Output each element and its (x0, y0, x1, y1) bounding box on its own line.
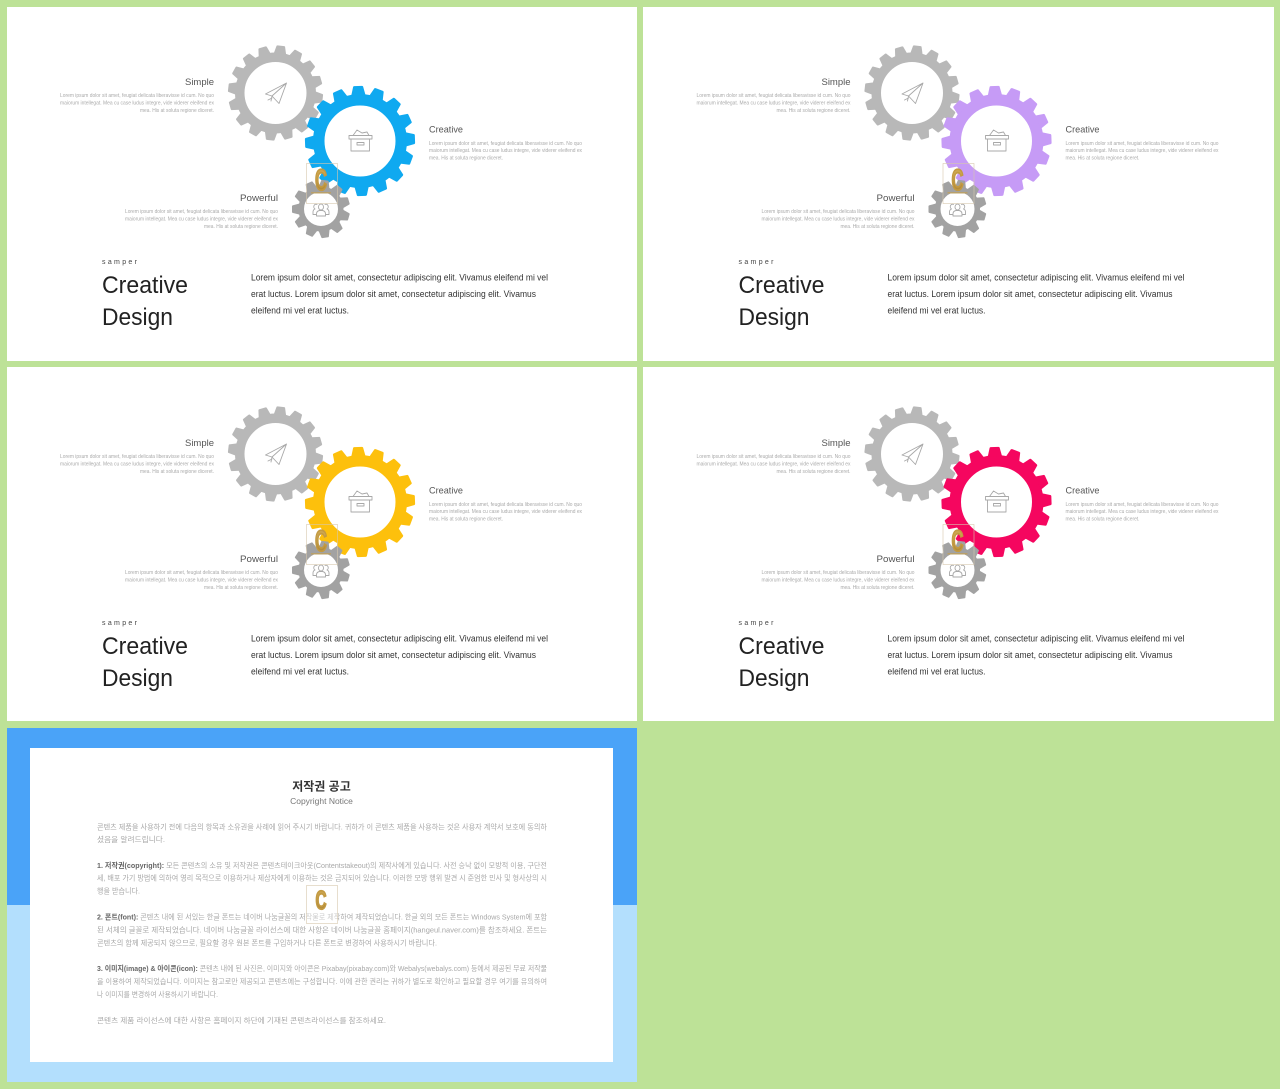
heading (102, 259, 188, 331)
body text: eleifend mi vel erat luctus. (888, 306, 986, 316)
heading: samper (738, 259, 774, 266)
text: Simple: Lorem ipsum dolor sit amet, feugiat delicata liberavisse id cum. No quo (696, 93, 851, 99)
notice section 2: 된 서체의 글꼴로 제작되었습니다. 네이버 나눔글꼴 라이선스에 대한 사항은 네이버 나눔글꼴 홈페이지(hangeul.naver.com)를 참조하세요. 폰트는 (97, 924, 547, 934)
text: Powerful: maiorum intellegat. Mea cu case ludus integre, vide viderer eleifend ex (125, 578, 278, 584)
text: Creative: mea. His at soluta regione diceret. (429, 516, 503, 522)
logo watermark: C (316, 885, 327, 915)
text: Powerful: Powerful (240, 193, 278, 204)
text: Creative (429, 124, 582, 162)
text: Creative (1066, 124, 1219, 162)
logo watermark: C (952, 525, 964, 558)
text: Simple (60, 438, 214, 475)
notice section 3 (97, 963, 547, 999)
panel: pink gears (643, 367, 1274, 721)
text: Powerful: Powerful (240, 554, 278, 565)
text: Simple: mea. His at soluta regione diceret. (776, 469, 850, 475)
icon: box (349, 130, 372, 151)
text: Creative (429, 486, 582, 522)
notice section 2 (97, 912, 547, 948)
color gear: Creative (940, 84, 1053, 198)
notice section 3: 나 이미지를 변경하여 사용하시기 바랍니다. (97, 989, 218, 999)
text: Powerful: Lorem ipsum dolor sit amet, feugiat delicata liberavisse id cum. No quo (125, 209, 278, 215)
gray gear: Simple (859, 401, 965, 507)
body text: erat luctus. Lorem ipsum dolor sit amet, consectetur adipiscing elit. Vivamus (888, 289, 1173, 299)
text: Simple: maiorum intellegat. Mea cu case ludus integre, vide viderer eleifend ex (60, 462, 214, 468)
text: Powerful: Powerful (876, 193, 914, 204)
text: Powerful: mea. His at soluta regione diceret. (204, 224, 278, 230)
text: Creative: Creative (1066, 124, 1100, 136)
logo watermark (306, 164, 338, 204)
heading: Design (102, 665, 173, 692)
heading: Creative (102, 633, 188, 660)
text: Creative: Lorem ipsum dolor sit amet, feugiat delicata liberavisse id cum. No quo (1066, 502, 1219, 508)
text: Powerful: maiorum intellegat. Mea cu case ludus integre, vide viderer eleifend ex (762, 216, 915, 222)
text: Creative: maiorum intellegat. Mea cu case ludus integre, vide viderer eleifend ex (429, 509, 582, 515)
body text: eleifend mi vel erat luctus. (251, 666, 349, 676)
text: Creative: mea. His at soluta regione diceret. (1066, 516, 1140, 522)
gray gear: Powerful (288, 176, 354, 242)
icon: users (313, 204, 329, 216)
text: Simple: mea. His at soluta regione diceret. (140, 469, 214, 475)
notice title: Copyright Notice (290, 796, 353, 806)
text: Creative: mea. His at soluta regione diceret. (429, 156, 503, 162)
heading: Creative (738, 633, 824, 660)
panel: copyright notice (7, 728, 637, 1082)
notice intro: 콘텐츠 제품을 사용하기 전에 다음의 항목과 소유권을 사례에 읽어 주시기 바랍니다. 귀하가 이 콘텐츠 제품을 사용하는 것은 사용자 계약서 보호에 동의하 (97, 822, 547, 832)
gray gear: Simple (859, 40, 965, 146)
logo watermark: C (952, 164, 964, 197)
notice footer: 콘텐츠 제품 라이선스에 대한 사항은 홈페이지 하단에 기재된 콘텐츠라이선스를 참조하세요. (97, 1015, 386, 1025)
text: Creative (1066, 486, 1219, 522)
body text: eleifend mi vel erat luctus. (888, 666, 986, 676)
text: Creative: Creative (429, 124, 463, 136)
panel: yellow gears (7, 367, 637, 721)
text: Creative: maiorum intellegat. Mea cu case ludus integre, vide viderer eleifend ex (1066, 148, 1219, 154)
text: Simple: mea. His at soluta regione diceret. (140, 108, 214, 114)
heading: Creative (738, 272, 824, 299)
text: Simple: maiorum intellegat. Mea cu case ludus integre, vide viderer eleifend ex (696, 100, 851, 106)
gray gear: Powerful (924, 176, 991, 242)
notice section 1: 1. 저작권(copyright): 모든 콘텐츠의 소유 및 저작권은 콘텐츠테이크아웃(Contentstakeout)의 제작사에게 있습니다. 사전 승낙 없이 모방적 이용, 구단전 (97, 860, 547, 870)
body text: eleifend mi vel erat luctus. (251, 306, 349, 316)
heading: samper (738, 620, 774, 627)
text: Powerful: Lorem ipsum dolor sit amet, feugiat delicata liberavisse id cum. No quo (762, 209, 915, 215)
body text (888, 634, 1185, 676)
text: Creative: Lorem ipsum dolor sit amet, feugiat delicata liberavisse id cum. No quo (429, 502, 582, 508)
text: Simple: Simple (822, 77, 850, 88)
heading (738, 259, 824, 331)
text: Creative: maiorum intellegat. Mea cu case ludus integre, vide viderer eleifend ex (429, 148, 582, 154)
text: Creative: Creative (1066, 486, 1100, 496)
text: Powerful: Powerful (876, 554, 914, 565)
body text (251, 272, 548, 316)
notice section 3: 을 이용하여 제작되었습니다. 이미지는 참고로만 제공되고 콘텐츠에는 구성합니다. 이에 관한 권리는 귀하가 별도로 확인하고 필요할 경우 여기를 유의하여 (97, 976, 547, 986)
color gear: Creative (303, 445, 417, 559)
notice intro (97, 822, 547, 844)
heading: samper (102, 259, 138, 266)
panel: purple gears (643, 7, 1274, 361)
notice section 1: 세, 배포 가기 방법에 의하여 영리 목적으로 이용하거나 제삼자에게 이용하는 것은 금지되어 있습니다. 이러한 모방 행위 발견 시 준엄한 민사 및 형사상의 시 (97, 872, 547, 882)
text: Creative: mea. His at soluta regione diceret. (1066, 156, 1140, 162)
heading: Design (738, 304, 810, 331)
notice section 1 (97, 860, 547, 896)
text: Simple: Lorem ipsum dolor sit amet, feugiat delicata liberavisse id cum. No quo (696, 454, 851, 460)
logo watermark (306, 885, 338, 924)
heading: Creative (102, 272, 188, 299)
gray gear: Powerful (288, 537, 354, 603)
text: Creative: Lorem ipsum dolor sit amet, feugiat delicata liberavisse id cum. No quo (429, 141, 582, 147)
logo watermark: C (315, 164, 327, 197)
heading: Design (102, 304, 173, 331)
notice section 2: 2. 폰트(font): 콘텐츠 내에 된 서있는 한글 폰트는 네이버 나눔글꼴의 저작물로 제작하여 제작되었습니다. 한글 외의 모든 폰트는 Windows System에 포함 (97, 912, 547, 922)
heading: samper (102, 620, 138, 627)
color gear: Creative (303, 84, 417, 198)
text: Simple (60, 77, 214, 114)
text: Simple: mea. His at soluta regione diceret. (776, 108, 850, 114)
icon: users (950, 204, 966, 216)
text: Powerful: maiorum intellegat. Mea cu case ludus integre, vide viderer eleifend ex (762, 578, 915, 584)
icon: paper plane (902, 83, 923, 104)
text: Creative: maiorum intellegat. Mea cu case ludus integre, vide viderer eleifend ex (1066, 509, 1219, 515)
icon: box (349, 491, 372, 512)
text: Powerful (762, 554, 915, 591)
notice title (290, 778, 353, 806)
gray gear: Simple (223, 40, 328, 146)
notice section 3: 3. 이미지(image) & 아이콘(icon): 콘텐츠 내에 된 사진은, 이미지와 아이콘은 Pixabay(pixabay.com)와 Webalys(webalys.com) 등에서 제공된 무료 저작물 (97, 963, 547, 973)
logo watermark (306, 524, 338, 564)
text: Simple: Simple (185, 77, 214, 88)
body text: Lorem ipsum dolor sit amet, consectetur adipiscing elit. Vivamus eleifend mi vel (888, 272, 1185, 282)
text: Powerful: Lorem ipsum dolor sit amet, feugiat delicata liberavisse id cum. No quo (762, 570, 915, 576)
gray gear: Powerful (924, 537, 991, 603)
text: Powerful (762, 193, 915, 230)
heading (102, 620, 188, 692)
gray gear: Simple (223, 401, 328, 507)
panel: blue gears (7, 7, 637, 361)
body text: erat luctus. Lorem ipsum dolor sit amet, consectetur adipiscing elit. Vivamus (251, 650, 537, 660)
icon: paper plane (266, 83, 286, 104)
text: Powerful: mea. His at soluta regione diceret. (204, 585, 278, 591)
notice section 2: 콘텐츠의 함께 제공되지 않으므로, 필요할 경우 원본 폰트를 구입하거나 다른 폰트로 변경하여 사용하시기 바랍니다. (97, 938, 437, 948)
notice title: 저작권 공고 (292, 778, 351, 794)
text: Powerful (125, 193, 278, 230)
heading (738, 620, 824, 692)
body text: erat luctus. Lorem ipsum dolor sit amet, consectetur adipiscing elit. Vivamus (251, 289, 537, 299)
body text: Lorem ipsum dolor sit amet, consectetur adipiscing elit. Vivamus eleifend mi vel (888, 634, 1185, 644)
logo watermark (943, 164, 974, 204)
text: Powerful (125, 554, 278, 591)
icon: paper plane (902, 444, 923, 464)
icon: users (950, 565, 966, 577)
body text: Lorem ipsum dolor sit amet, consectetur adipiscing elit. Vivamus eleifend mi vel (251, 272, 548, 282)
heading: Design (738, 665, 810, 692)
text: Simple: Simple (822, 438, 850, 449)
text: Simple: maiorum intellegat. Mea cu case ludus integre, vide viderer eleifend ex (696, 462, 851, 468)
text: Simple: Simple (185, 438, 214, 449)
text: Creative: Lorem ipsum dolor sit amet, feugiat delicata liberavisse id cum. No quo (1066, 141, 1219, 147)
text: Powerful: mea. His at soluta regione diceret. (840, 585, 914, 591)
body text (251, 634, 548, 676)
text: Powerful: Lorem ipsum dolor sit amet, feugiat delicata liberavisse id cum. No quo (125, 570, 278, 576)
body text (888, 272, 1185, 316)
icon: box (986, 130, 1008, 151)
text: Creative: Creative (429, 486, 463, 496)
text: Simple: Lorem ipsum dolor sit amet, feugiat delicata liberavisse id cum. No quo (60, 454, 214, 460)
notice section 1: 행을 받습니다. (97, 886, 140, 896)
body text: erat luctus. Lorem ipsum dolor sit amet, consectetur adipiscing elit. Vivamus (888, 650, 1173, 660)
logo watermark (943, 524, 974, 564)
icon: box (986, 491, 1008, 512)
body text: Lorem ipsum dolor sit amet, consectetur adipiscing elit. Vivamus eleifend mi vel (251, 634, 548, 644)
text: Simple: maiorum intellegat. Mea cu case ludus integre, vide viderer eleifend ex (60, 100, 214, 106)
text: Simple: Lorem ipsum dolor sit amet, feugiat delicata liberavisse id cum. No quo (60, 93, 214, 99)
color gear: Creative (940, 445, 1053, 559)
text: Simple (696, 77, 851, 114)
text: Powerful: mea. His at soluta regione diceret. (840, 224, 914, 230)
text: Powerful: maiorum intellegat. Mea cu case ludus integre, vide viderer eleifend ex (125, 216, 278, 222)
text: Simple (696, 438, 851, 475)
icon: paper plane (266, 444, 286, 464)
notice intro: 셨음을 알려드립니다. (97, 834, 165, 844)
logo watermark: C (315, 525, 327, 558)
icon: users (313, 565, 329, 577)
